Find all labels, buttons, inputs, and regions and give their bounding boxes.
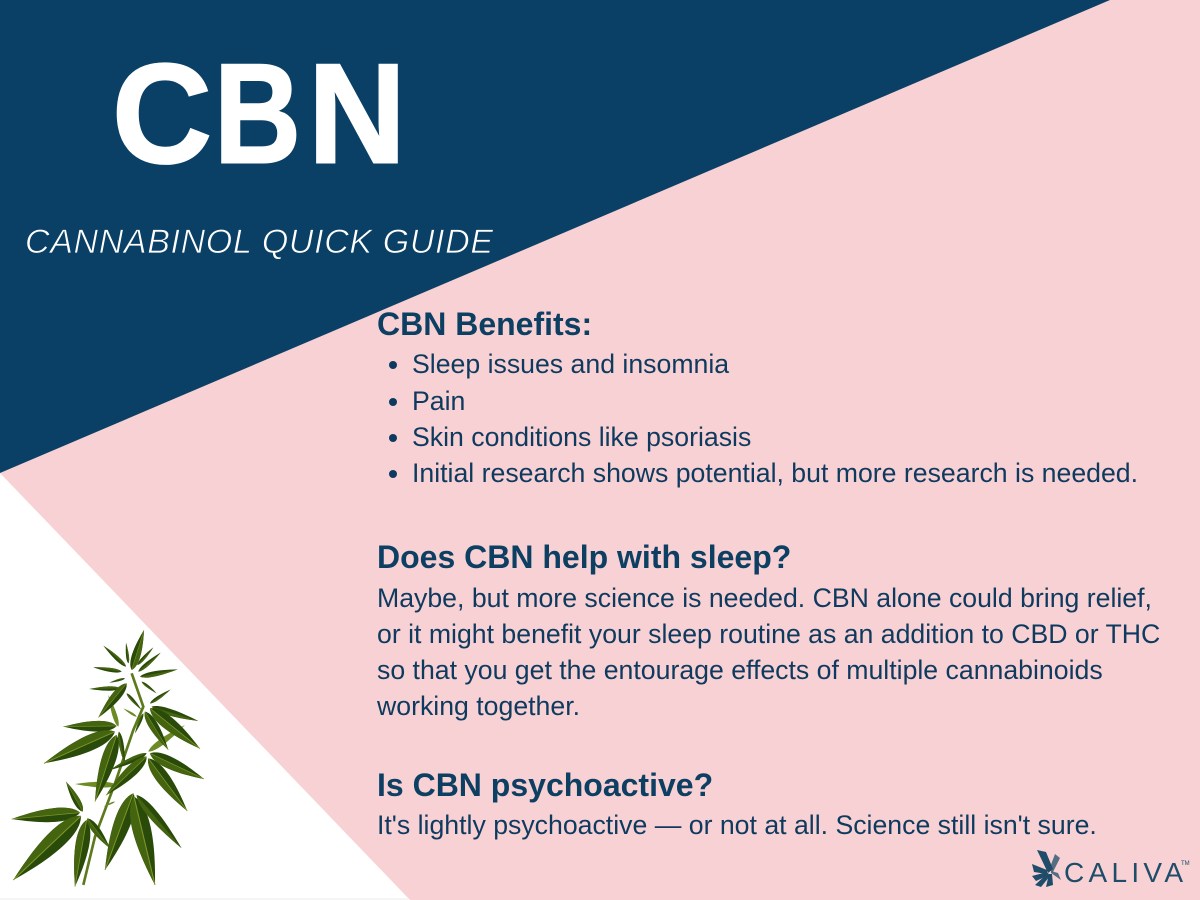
benefits list	[389, 349, 1138, 488]
sleep paragraph: working together.	[376, 691, 580, 721]
logo wordmark: CALIVA	[1064, 857, 1183, 888]
benefits list: Initial research shows potential, but more research is needed.	[412, 458, 1138, 488]
benefits list: Skin conditions like psoriasis	[412, 422, 751, 452]
title: C	[112, 34, 212, 194]
heading: psychoactive: Is CBN psychoactive?	[377, 767, 713, 803]
benefits list: Pain	[412, 386, 465, 416]
panel: white triangle	[0, 473, 410, 900]
heading: CBN benefits: CBN Benefits:	[377, 306, 592, 342]
section: psychoactive	[377, 767, 1097, 840]
sleep paragraph: so that you get the entourage effects of multiple cannabinoids	[377, 655, 1103, 685]
icon: cannabis plant	[7, 629, 207, 888]
heading: sleep: Does CBN help with sleep?	[377, 539, 791, 575]
psychoactive paragraph: It's lightly psychoactive — or not at all. Science still isn't sure.	[377, 810, 1097, 840]
sleep paragraph: Maybe, but more science is needed. CBN alone could bring relief,	[377, 583, 1152, 613]
section: sleep	[376, 539, 1160, 721]
subtitle: CANNABINOL QUICK GUIDE	[25, 223, 493, 261]
title	[112, 34, 406, 194]
benefits list: Sleep issues and insomnia	[412, 349, 729, 379]
sleep paragraph	[376, 583, 1160, 721]
icon: logo leaf fan	[1032, 850, 1061, 887]
trademark: TM	[1181, 861, 1190, 867]
logo: Caliva	[1032, 850, 1190, 888]
title: B	[214, 34, 301, 194]
section: CBN benefits	[377, 306, 1138, 488]
sleep paragraph: or it might benefit your sleep routine as an addition to CBD or THC	[377, 619, 1160, 649]
panel: navy triangle	[0, 0, 1110, 473]
title: N	[308, 34, 406, 194]
